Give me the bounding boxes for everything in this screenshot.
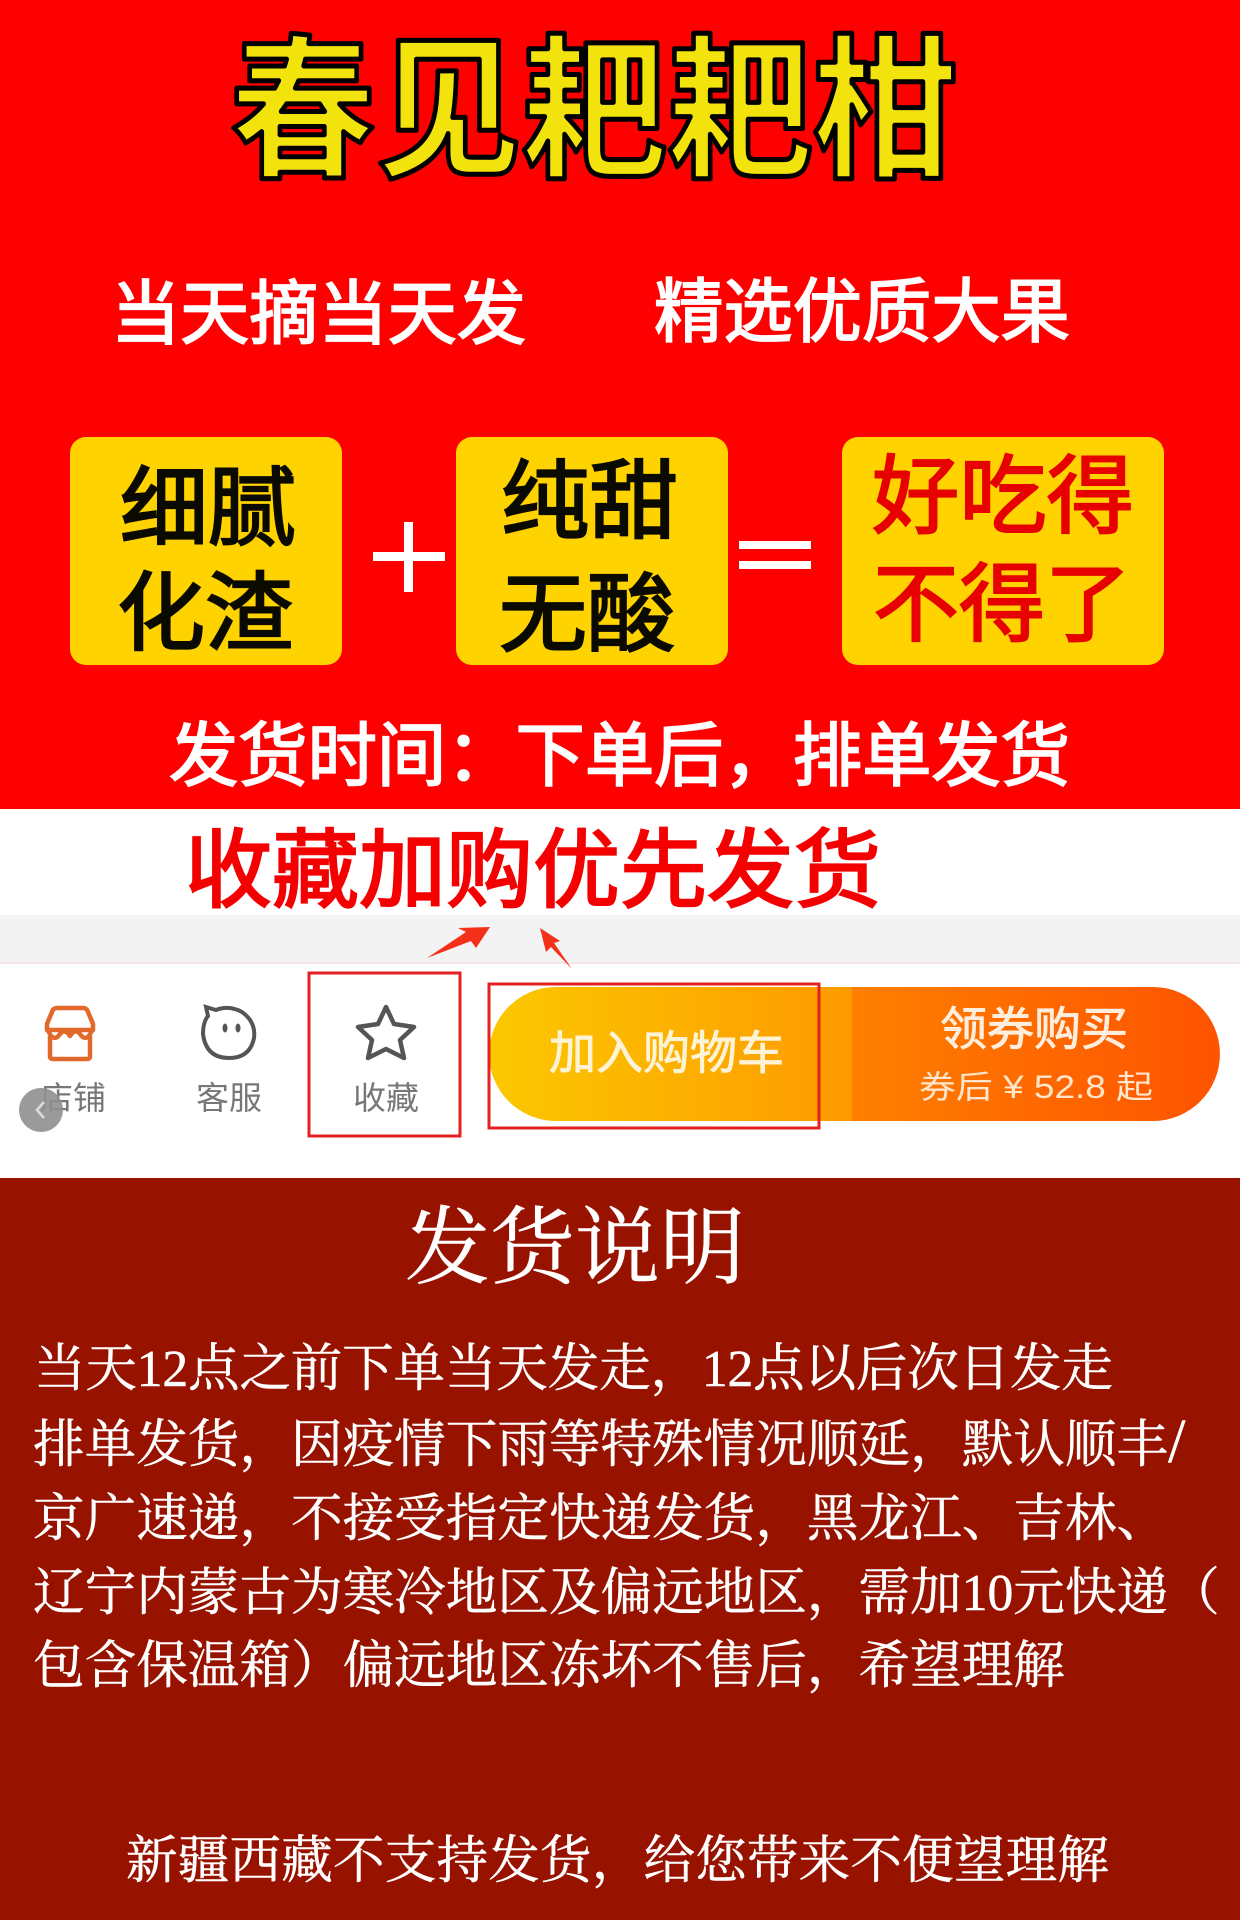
label: store: 店铺 — [40, 1080, 106, 1116]
button text: add to cart: 加入购物车 — [549, 1027, 784, 1079]
highlight box: add to cart — [489, 984, 819, 1128]
button text: claim coupon and buy: 领券购买 — [940, 1003, 1128, 1055]
subheading: picked and shipped same day: 当天摘当天发 — [111, 275, 526, 353]
card: delicate texture: 化渣 — [117, 566, 293, 662]
body text: shipping notes: 京广速递，不接受指定快递发货，黑龙江、吉林、 — [33, 1491, 1168, 1548]
card: incredibly delicious: 不得了 — [873, 557, 1131, 653]
app bar grey strip — [0, 915, 1240, 963]
panel: add to favourites and cart — [0, 809, 1240, 1178]
icon: equals sign — [739, 541, 811, 569]
card: incredibly delicious — [842, 437, 1164, 665]
card: delicate texture: 细腻 — [120, 461, 296, 557]
subheading: selected quality large fruit: 精选优质大果 — [654, 273, 1070, 351]
icon: store — [47, 1008, 93, 1059]
heading: shipping notes: 发货说明 — [405, 1202, 745, 1296]
title: 春见耙耙柑 — [230, 25, 958, 198]
card: pure sweet no sourness: 纯甜 — [501, 454, 678, 550]
body text: shipping notes: 当天12点之前下单当天发走，12点以后次日发走 — [34, 1341, 1113, 1398]
heading: favourite and add to cart for priority shipping: 收藏加购优先发货 — [185, 823, 881, 919]
icon: customer service face — [203, 1007, 254, 1058]
body text: shipping notes: 包含保温箱）偏远地区冻坏不售后，希望理解 — [33, 1638, 1065, 1695]
button text: price after coupon: 券后 ¥ 52.8 起 — [919, 1069, 1153, 1105]
label: favourite: 收藏 — [353, 1080, 419, 1116]
button: add to cart and buy — [489, 987, 1220, 1121]
shipping time line: 发货时间：下单后，排单发货 — [169, 717, 1070, 795]
arrow: towards heading left — [427, 927, 490, 958]
card: incredibly delicious: 好吃得 — [872, 449, 1134, 545]
highlight box: favourite — [309, 973, 460, 1136]
panel: shipping notes — [0, 1178, 1240, 1920]
label: customer service: 客服 — [196, 1080, 262, 1116]
card: pure sweet no sourness — [456, 437, 728, 665]
icon: plus sign — [373, 522, 445, 592]
icon: back button circle — [19, 1088, 63, 1132]
body text: shipping notes: 排单发货，因疫情下雨等特殊情况顺延，默认顺丰/ — [33, 1408, 1186, 1476]
card: pure sweet no sourness: 无酸 — [499, 567, 675, 663]
arrow: towards heading right — [540, 928, 572, 969]
panel: red hero section — [0, 0, 1240, 809]
body text: shipping notes: 辽宁内蒙古为寒冷地区及偏远地区，需加10元快递（ — [33, 1565, 1220, 1622]
icon: star — [358, 1007, 414, 1058]
body text: shipping notes — [33, 1341, 1220, 1695]
footer note: Xinjiang and Tibet not supported: 新疆西藏不支持发货，给您带来不便望理解 — [126, 1833, 1109, 1890]
card: delicate texture — [70, 437, 342, 665]
